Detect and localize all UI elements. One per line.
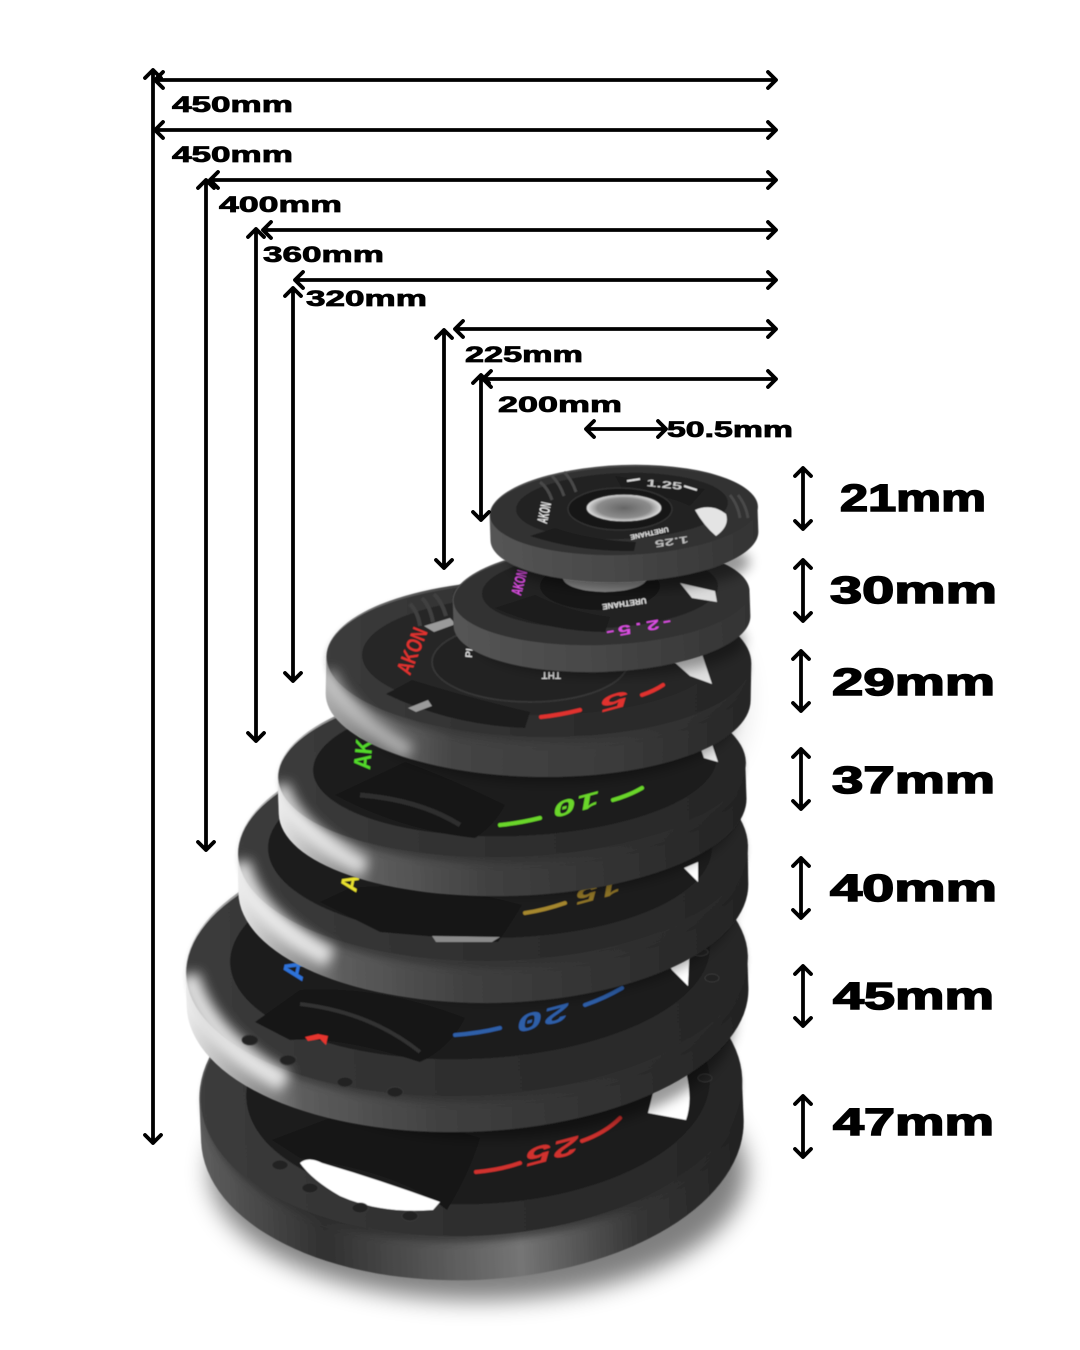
weight number top xyxy=(627,478,697,493)
diameter labels: 225mm xyxy=(465,342,583,367)
window xyxy=(695,507,727,536)
plate: 15 kg: 15 xyxy=(573,870,624,910)
wedge xyxy=(335,762,505,838)
dimension arrows: plate thickness xyxy=(793,468,811,1157)
diameter labels: 450mm xyxy=(172,92,293,117)
dimension arrows: horizontal diameters xyxy=(155,72,776,437)
weight number 2.5: -2.5- xyxy=(602,612,675,641)
diameter labels: 360mm xyxy=(263,242,384,267)
window xyxy=(672,654,712,684)
window xyxy=(684,862,698,882)
plate: 15 kg xyxy=(236,790,750,1004)
diameter labels: 320mm xyxy=(306,286,427,311)
upper gap xyxy=(424,618,456,632)
thickness labels: 45mm xyxy=(833,976,994,1018)
wedge xyxy=(386,680,530,728)
upper arm xyxy=(615,476,705,506)
plate: 1.25 kg xyxy=(488,460,760,590)
logo: AKON xyxy=(391,624,433,678)
rim highlight xyxy=(240,862,330,958)
thickness labels xyxy=(830,478,997,1144)
plate: 10 kg xyxy=(276,716,748,896)
window xyxy=(700,738,718,762)
logo: AKON xyxy=(349,706,381,771)
wedge xyxy=(495,595,610,632)
stack shadow xyxy=(210,580,750,1300)
hub label: URETHANE xyxy=(601,596,647,611)
rim highlight xyxy=(188,975,285,1082)
hub xyxy=(432,622,628,702)
plate: 10 kg: 10 xyxy=(551,783,602,823)
lower gap xyxy=(408,700,432,712)
thickness labels: 37mm xyxy=(832,760,995,802)
plate: 20 kg: 20 xyxy=(514,994,573,1037)
window xyxy=(662,940,690,986)
weight number bottom: 1.25 xyxy=(653,533,689,549)
weight number 15 xyxy=(525,903,565,913)
plate: 25 kg: 25 xyxy=(522,1126,583,1172)
wedge xyxy=(255,989,465,1062)
logo fragment xyxy=(296,1102,308,1111)
plate: 5 kg: 5 xyxy=(597,682,632,717)
thickness labels: 40mm xyxy=(830,868,997,910)
logo: AKON xyxy=(508,568,531,597)
hub text: PLATE xyxy=(464,625,478,658)
weight number 10 xyxy=(500,788,642,825)
hub xyxy=(568,488,672,530)
rim highlight xyxy=(280,785,365,868)
thickness labels: 47mm xyxy=(833,1102,994,1144)
wedge xyxy=(320,886,522,942)
weight number 20 xyxy=(455,988,622,1035)
hub glimpse xyxy=(432,936,500,942)
window xyxy=(680,583,717,602)
logo: AKON xyxy=(335,820,377,894)
grip ridges xyxy=(410,594,446,626)
weight number 5 xyxy=(541,685,663,717)
logo: AKON xyxy=(277,890,327,983)
red marker xyxy=(305,1034,328,1045)
thickness labels: 21mm xyxy=(840,478,986,520)
diameter labels: 450mm xyxy=(172,142,293,167)
hub text lower: THT xyxy=(542,669,561,680)
thickness labels: 30mm xyxy=(830,570,997,612)
steel bore xyxy=(563,564,647,592)
grip ridges xyxy=(540,472,748,518)
diameter labels xyxy=(172,92,793,442)
rim highlight xyxy=(328,672,410,752)
plate: 2.5 kg xyxy=(451,540,752,677)
dimension arrows: vertical heights xyxy=(145,70,489,1143)
plate: 25 kg xyxy=(193,928,750,1292)
wedge with handle slot xyxy=(272,1118,480,1210)
diameter labels: 50.5mm xyxy=(667,417,793,442)
steel bore xyxy=(586,494,662,522)
plate: 5 kg xyxy=(324,576,753,782)
logo: AKON xyxy=(534,501,555,525)
weight number top: 1.25 xyxy=(646,478,683,493)
wedge xyxy=(530,528,636,551)
hub xyxy=(540,562,660,610)
thickness labels: 29mm xyxy=(832,662,995,704)
window xyxy=(648,1072,690,1120)
diameter labels: 400mm xyxy=(219,192,342,217)
diameter labels: 200mm xyxy=(498,392,622,417)
weight number 25 xyxy=(476,1118,620,1172)
plate: 20 kg xyxy=(184,892,750,1140)
hub label: URETHANE xyxy=(629,525,669,540)
